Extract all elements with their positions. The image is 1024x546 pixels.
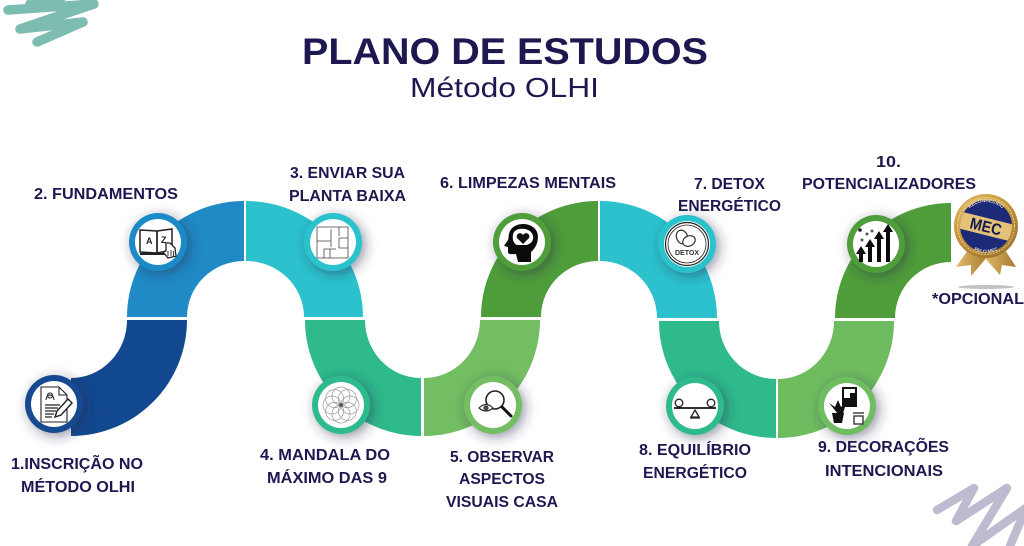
label: 4. MANDALA DO MÁXIMO DAS 9: MÁXIMO DAS 9 — [267, 470, 387, 487]
label: 8. EQUILÍBRIO ENERGÉTICO: ENERGÉTICO — [643, 465, 747, 482]
label: 9. DECORAÇÕES INTENCIONAIS: 9. DECORAÇÕES — [818, 438, 949, 456]
label: 10. POTENCIALIZADORES: 10. — [876, 154, 901, 171]
title: PLANO DE ESTUDOS — [302, 31, 708, 72]
label: 3. ENVIAR SUA PLANTA BAIXA: PLANTA BAIXA — [289, 188, 406, 205]
icon 8: balance seesaw — [666, 377, 724, 435]
label: 7. DETOX ENERGÉTICO — [678, 176, 781, 215]
decorative scribble: bottom right lilac — [937, 488, 1024, 546]
icon 5: eye with magnifier — [464, 376, 522, 434]
icon 3: floor plan — [304, 213, 362, 271]
ribbon segment 9 — [778, 321, 894, 438]
ribbon segment 1 — [71, 320, 187, 436]
label: 4. MANDALA DO MÁXIMO DAS 9: 4. MANDALA DO — [260, 447, 390, 464]
label: 6. LIMPEZAS MENTAIS: 6. LIMPEZAS MENTAIS — [440, 175, 616, 192]
badge: MEC seal: RECONHECIDO — [968, 198, 1004, 208]
label: *OPCIONAL: *OPCIONAL — [932, 291, 1024, 308]
badge: MEC seal — [954, 194, 1018, 276]
label: 1.INSCRIÇÃO NO MÉTODO OLHI: 1.INSCRIÇÃO NO — [11, 455, 143, 473]
label: 10. POTENCIALIZADORES — [802, 154, 976, 193]
label: 5. OBSERVAR ASPECTOS VISUAIS CASA — [446, 449, 558, 511]
badge shadow — [958, 285, 1014, 289]
icon 1: document with pencil — [25, 375, 83, 433]
label: 9. DECORAÇÕES INTENCIONAIS: INTENCIONAIS — [825, 463, 943, 480]
ribbon segment 10 — [835, 203, 951, 318]
ribbon segment 7 — [600, 201, 717, 318]
label: 1.INSCRIÇÃO NO MÉTODO OLHI: MÉTODO OLHI — [21, 479, 135, 496]
subtitle: Método OLHI — [410, 72, 599, 103]
icon 2: dictionary with hand: Z — [161, 235, 167, 245]
label: 9. DECORAÇÕES INTENCIONAIS — [818, 438, 949, 480]
badge: MEC seal: MEC — [968, 215, 1004, 240]
label: 5. OBSERVAR ASPECTOS VISUAIS CASA: VISUAIS CASA — [446, 494, 558, 511]
icon 10: rising arrows — [847, 215, 905, 273]
icon 6: head with brain — [493, 213, 551, 271]
ribbon segment 2 — [127, 201, 244, 317]
label: 8. EQUILÍBRIO ENERGÉTICO: 8. EQUILÍBRIO — [639, 442, 751, 459]
label: 8. EQUILÍBRIO ENERGÉTICO — [639, 442, 751, 482]
badge: MEC seal: PELO MEC — [974, 247, 998, 253]
ribbon segment 5 — [424, 320, 540, 436]
ribbon segment 4 — [305, 320, 421, 436]
icon 9: plant, picture and furniture — [818, 377, 876, 435]
label: 3. ENVIAR SUA PLANTA BAIXA: 3. ENVIAR SUA — [290, 165, 405, 182]
icon 4: mandala flower — [312, 376, 370, 434]
label: 5. OBSERVAR ASPECTOS VISUAIS CASA: 5. OBSERVAR — [450, 449, 554, 466]
label: 7. DETOX ENERGÉTICO: 7. DETOX — [694, 176, 766, 193]
label: 3. ENVIAR SUA PLANTA BAIXA — [289, 165, 406, 205]
decorative scribble: top left teal — [8, 0, 94, 42]
label: 10. POTENCIALIZADORES: POTENCIALIZADORES — [802, 176, 976, 193]
label: 2. FUNDAMENTOS: 2. FUNDAMENTOS — [34, 186, 178, 203]
icon 2: dictionary with hand — [129, 213, 187, 271]
ribbon segment 3 — [246, 201, 363, 317]
icon 7: detox seal — [658, 215, 716, 273]
label: 1.INSCRIÇÃO NO MÉTODO OLHI — [11, 455, 143, 496]
ribbon segment 8 — [659, 321, 776, 438]
ribbon segment 6 — [481, 201, 598, 317]
label: 4. MANDALA DO MÁXIMO DAS 9 — [260, 447, 390, 487]
label: 7. DETOX ENERGÉTICO: ENERGÉTICO — [678, 198, 781, 215]
icon 7: detox seal: DETOX — [675, 250, 699, 257]
label: 5. OBSERVAR ASPECTOS VISUAIS CASA: ASPECTOS — [459, 471, 545, 488]
icon 2: dictionary with hand: A — [146, 236, 153, 246]
